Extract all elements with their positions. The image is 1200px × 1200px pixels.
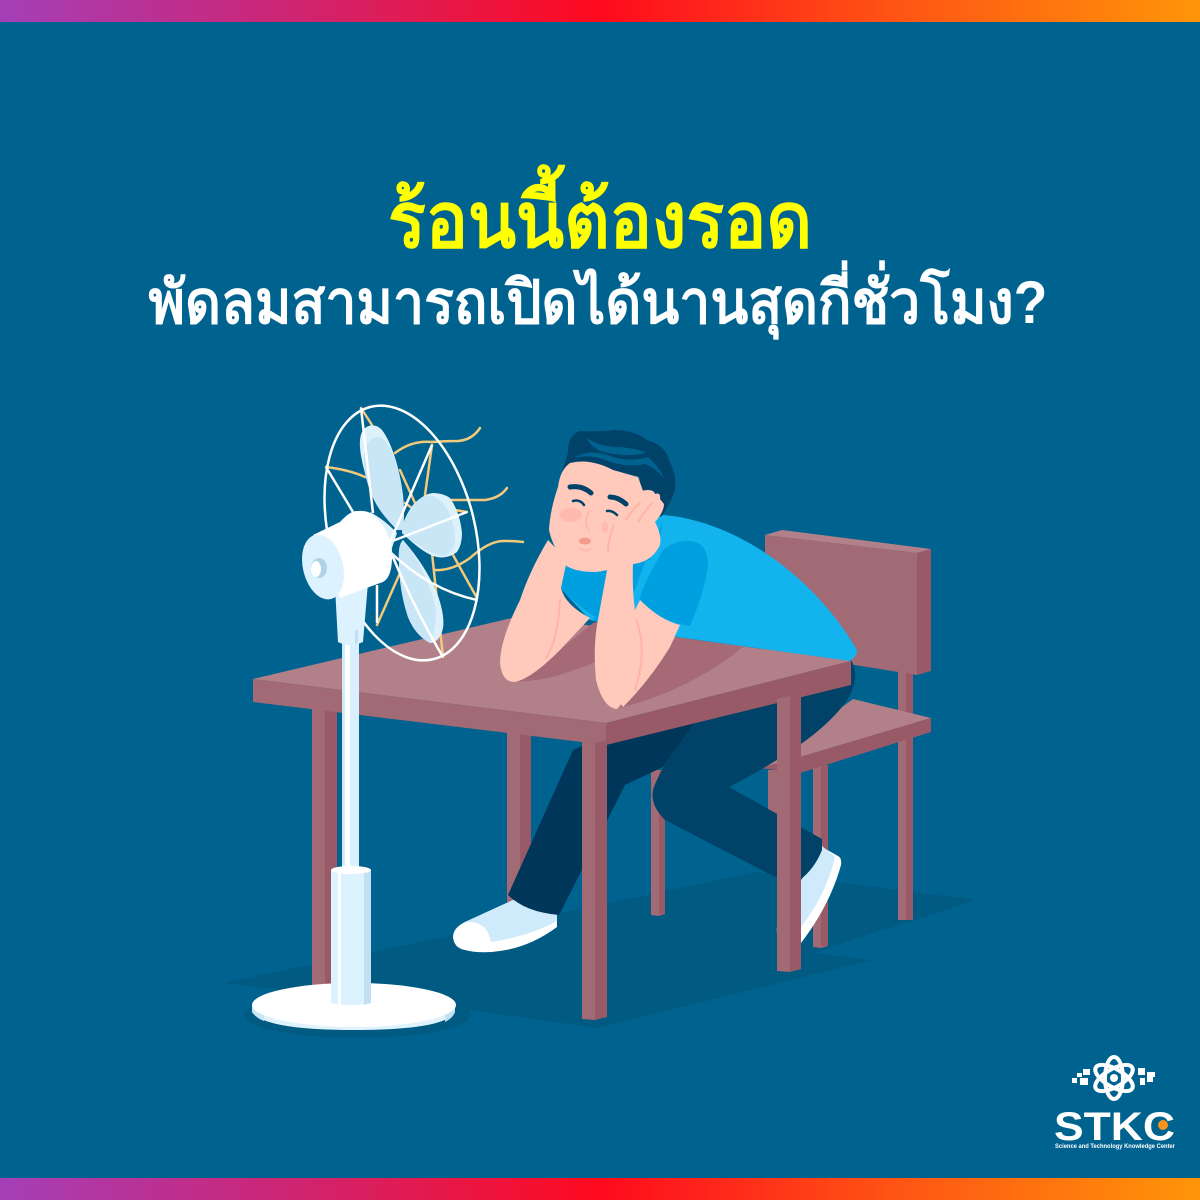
fan base <box>252 983 456 1030</box>
logo: STKC <box>1054 1057 1176 1150</box>
floor shadow <box>223 872 976 1028</box>
chair backrest <box>765 530 931 675</box>
logo dots <box>1072 1068 1155 1085</box>
man torso and head <box>500 430 857 709</box>
top gradient bar <box>0 0 1200 22</box>
face <box>549 462 650 572</box>
fan cage <box>300 389 504 677</box>
near leg <box>652 660 855 880</box>
title: ร้อนนี้ต้องรอด <box>388 164 812 264</box>
fan motor <box>296 511 392 604</box>
chair <box>651 530 931 948</box>
table back legs <box>507 730 531 902</box>
table front legs <box>582 693 801 1020</box>
chair front legs <box>651 765 828 948</box>
fan cage back lines <box>326 408 523 657</box>
fan neck <box>335 583 368 645</box>
bottom gradient bar <box>0 1178 1200 1200</box>
shirt <box>561 515 857 661</box>
title: พัดลมสามารถเปิดได้นานสุดกี่ชั่วโมง? <box>148 260 1048 340</box>
logo wordmark: STKC <box>1054 1105 1175 1149</box>
chair seat <box>760 699 931 773</box>
left arm <box>500 540 590 682</box>
man legs <box>453 660 855 952</box>
chair back legs <box>768 670 913 920</box>
logo atom icon <box>1091 1057 1137 1099</box>
upper arm <box>610 600 680 707</box>
logo tagline: Science and Technology Knowledge Center <box>1055 1144 1176 1150</box>
table <box>253 616 851 1020</box>
skin creases <box>546 503 652 690</box>
table left leg <box>312 700 337 985</box>
fan blades <box>360 425 462 643</box>
fan base shadow <box>244 992 470 1038</box>
far leg <box>508 723 695 915</box>
title <box>148 164 1048 340</box>
fan pole <box>342 636 359 874</box>
near forearm and hand <box>595 490 664 709</box>
fan <box>244 389 523 1038</box>
facial features <box>560 487 626 551</box>
table top surface <box>253 616 851 723</box>
fan column <box>331 866 371 1005</box>
hair <box>558 430 675 517</box>
near shoe <box>777 846 841 943</box>
arm shadows on table <box>517 618 743 708</box>
far shoe <box>453 900 557 952</box>
table front faces <box>253 661 851 745</box>
logo orange dot <box>1158 1120 1168 1130</box>
